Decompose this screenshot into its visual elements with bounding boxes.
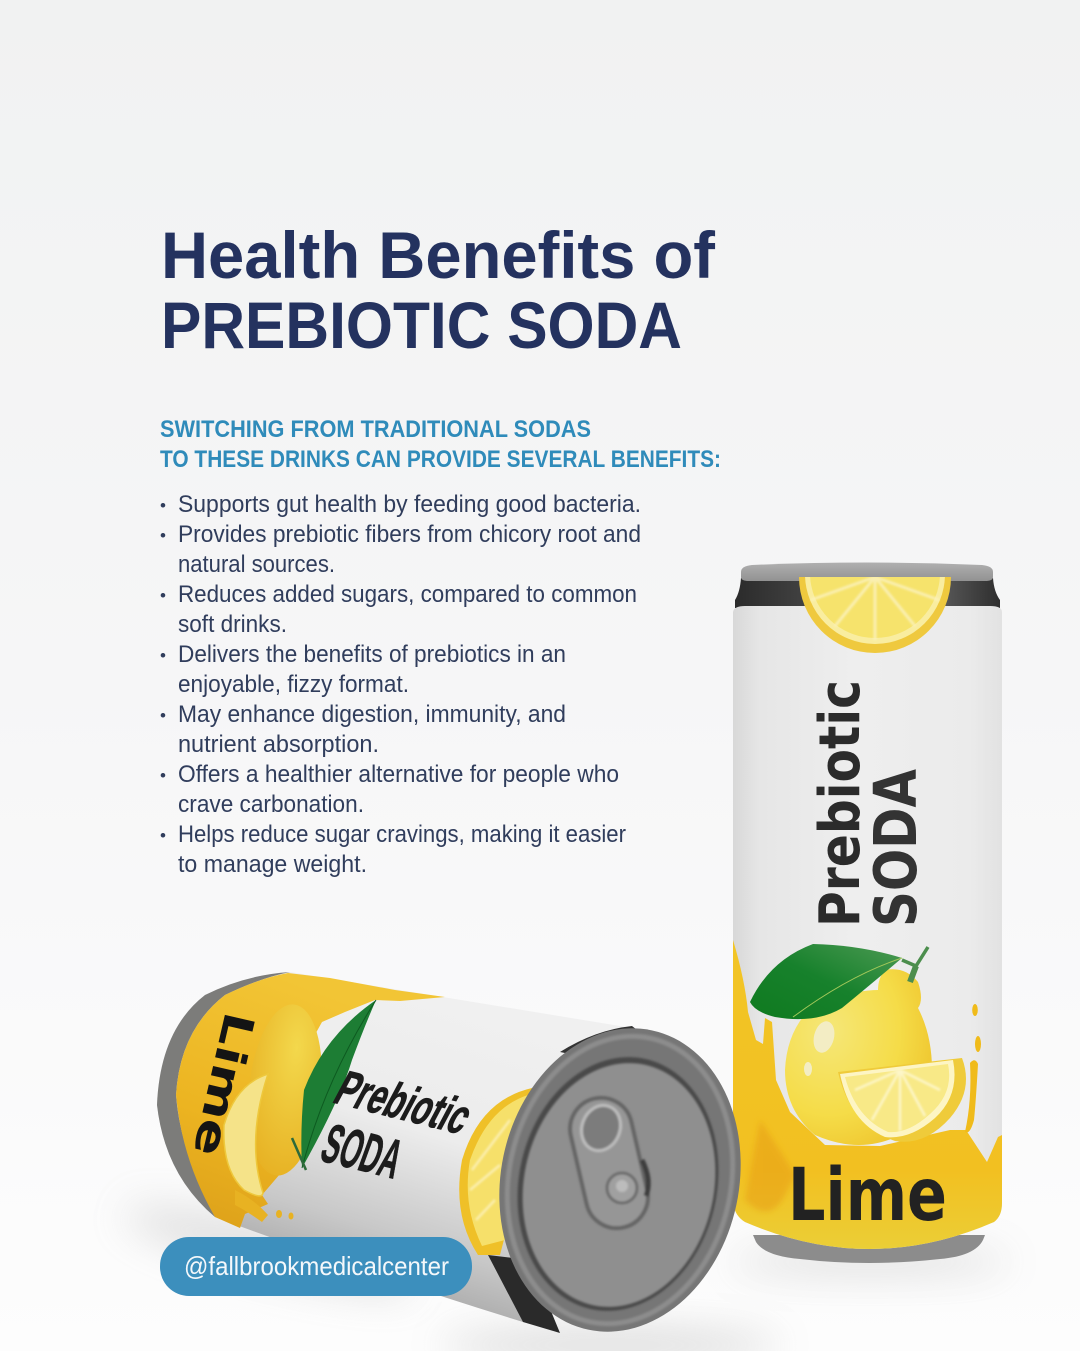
benefits list: Reduces added sugars, compared to common <box>178 581 637 608</box>
benefits list: Supports gut health by feeding good bacteria. <box>178 491 641 518</box>
splash droplets <box>965 1004 981 1132</box>
lid outer rim <box>472 1006 768 1351</box>
lemon slice on lying can <box>224 1074 268 1196</box>
handle pill: @fallbrookmedicalcenter <box>184 1251 449 1281</box>
subheading: TO THESE DRINKS CAN PROVIDE SEVERAL BENEFITS: <box>160 446 721 473</box>
floor shadows <box>119 1190 1010 1351</box>
benefits list: • <box>160 706 166 725</box>
benefits list: • <box>160 826 166 845</box>
pull tab <box>564 1092 654 1234</box>
yellow splash <box>733 940 1002 1270</box>
can label: Lime: Lime <box>788 1153 947 1238</box>
benefits list: • <box>160 766 166 785</box>
benefits list: • <box>160 526 166 545</box>
dark neck, lower <box>488 1255 560 1333</box>
benefits list: Helps reduce sugar cravings, making it easier <box>178 821 626 848</box>
benefits list: May enhance digestion, immunity, and <box>178 701 566 728</box>
back rim <box>157 972 290 1217</box>
benefits list: Provides prebiotic fibers from chicory root and <box>178 521 641 548</box>
standing can <box>733 501 1002 1270</box>
benefits list: natural sources. <box>178 551 335 578</box>
can base <box>753 1235 985 1263</box>
subheading <box>160 416 721 473</box>
lid rim highlight <box>481 1015 759 1345</box>
lemon slice by lid <box>459 1088 540 1255</box>
benefits list: Offers a healthier alternative for people who <box>178 761 619 788</box>
lid panel <box>501 1045 737 1325</box>
dark neck, upper <box>560 1026 650 1060</box>
benefits list: crave carbonation. <box>178 791 364 818</box>
lying can label: Lime: Lime <box>183 1008 264 1161</box>
benefits list: • <box>160 646 166 665</box>
lying can <box>157 972 768 1351</box>
lid groove <box>495 1038 741 1330</box>
lying can body <box>157 972 640 1322</box>
splash shading <box>745 1120 795 1211</box>
benefits list: Delivers the benefits of prebiotics in an <box>178 641 566 668</box>
title <box>161 218 716 362</box>
benefits list: enjoyable, fizzy format. <box>178 671 409 698</box>
lemon <box>785 969 932 1145</box>
can body <box>733 606 1002 1249</box>
lying can leaf <box>292 1000 376 1170</box>
lemon on lying can <box>240 1001 330 1179</box>
benefits list: to manage weight. <box>178 851 367 878</box>
benefits list <box>160 491 641 878</box>
yellow splash band <box>176 973 445 1228</box>
benefits list: soft drinks. <box>178 611 287 638</box>
subheading: SWITCHING FROM TRADITIONAL SODAS <box>160 416 591 443</box>
splash drops <box>235 1190 294 1222</box>
can neck <box>735 578 1000 608</box>
title: Health Benefits of <box>161 218 716 292</box>
title: PREBIOTIC SODA <box>161 288 682 362</box>
leaf <box>750 944 928 1019</box>
can rim <box>741 562 993 581</box>
benefits list: • <box>160 586 166 605</box>
lemon wedge <box>838 1058 966 1142</box>
lying can label: SODA: SODA <box>314 1112 411 1190</box>
handle pill <box>160 1237 472 1296</box>
benefits list: • <box>160 496 166 515</box>
lying can label: Prebiotic: Prebiotic <box>326 1061 482 1144</box>
can label: SODA: SODA <box>861 769 930 927</box>
benefits list: nutrient absorption. <box>178 731 379 758</box>
can label: Prebiotic: Prebiotic <box>808 680 873 927</box>
top lemon slice <box>799 577 951 653</box>
